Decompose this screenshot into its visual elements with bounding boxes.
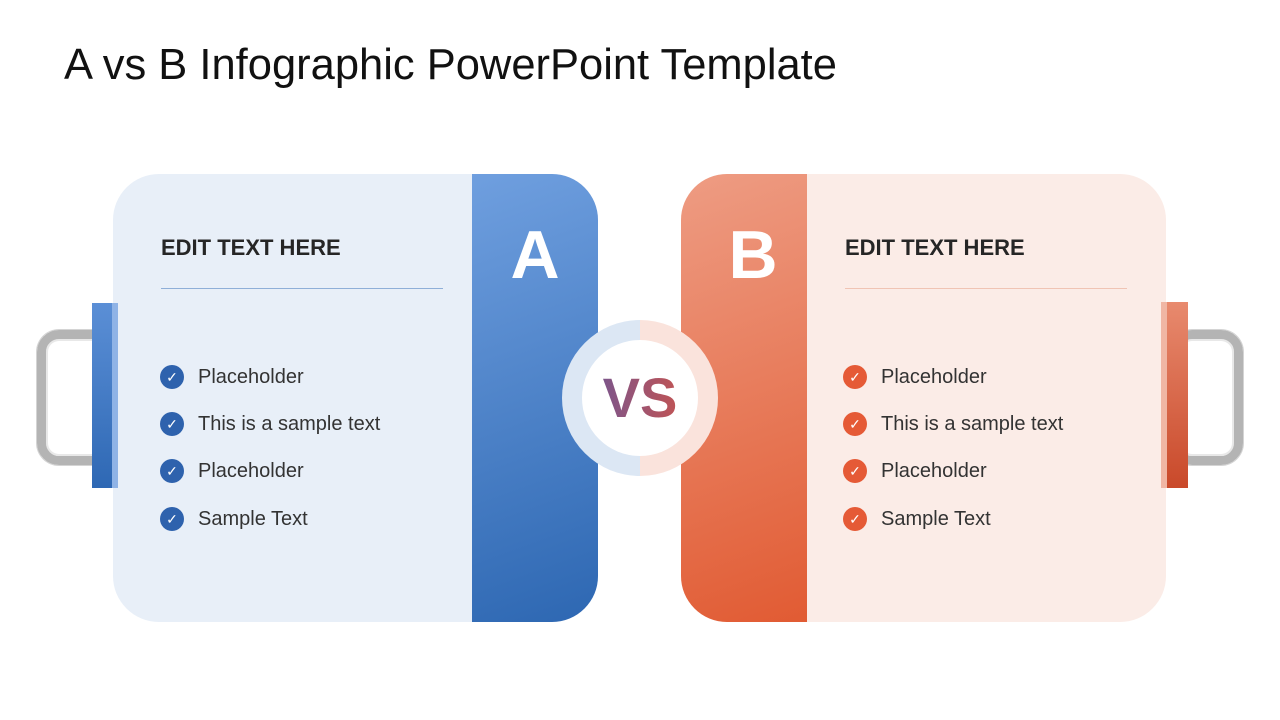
list B: ✓ — [849, 368, 861, 384]
list A: ✓ — [166, 510, 178, 526]
panel A — [113, 174, 598, 622]
strip A — [472, 174, 598, 622]
list B — [843, 365, 1064, 531]
bar right — [1161, 302, 1188, 488]
list A: ✓ — [166, 368, 178, 384]
vs circle: VS — [603, 366, 677, 429]
list B: Placeholder — [881, 460, 987, 482]
list A: ✓ — [166, 416, 178, 432]
bar left — [92, 303, 118, 488]
list A: This is a sample text — [198, 412, 380, 434]
letter A: A — [510, 217, 560, 293]
list B: ✓ — [849, 416, 861, 432]
list B: Placeholder — [881, 366, 987, 388]
heading B: EDIT TEXT HERE — [845, 235, 1025, 260]
strip B — [681, 174, 807, 622]
list A: ✓ — [166, 462, 178, 478]
list A: Placeholder — [198, 366, 304, 388]
list A: Sample Text — [198, 508, 308, 530]
vs circle — [562, 320, 718, 476]
list B: ✓ — [849, 462, 861, 478]
list B: This is a sample text — [881, 412, 1063, 434]
handle left — [37, 330, 117, 465]
list A: Placeholder — [198, 460, 304, 482]
list A — [160, 365, 380, 531]
heading A: EDIT TEXT HERE — [161, 235, 341, 260]
list B: ✓ — [849, 510, 861, 526]
title: A vs B Infographic PowerPoint Template — [64, 41, 837, 89]
panel B — [681, 174, 1166, 622]
letter B: B — [728, 217, 778, 293]
handle right — [1170, 330, 1243, 465]
list B: Sample Text — [881, 508, 991, 530]
